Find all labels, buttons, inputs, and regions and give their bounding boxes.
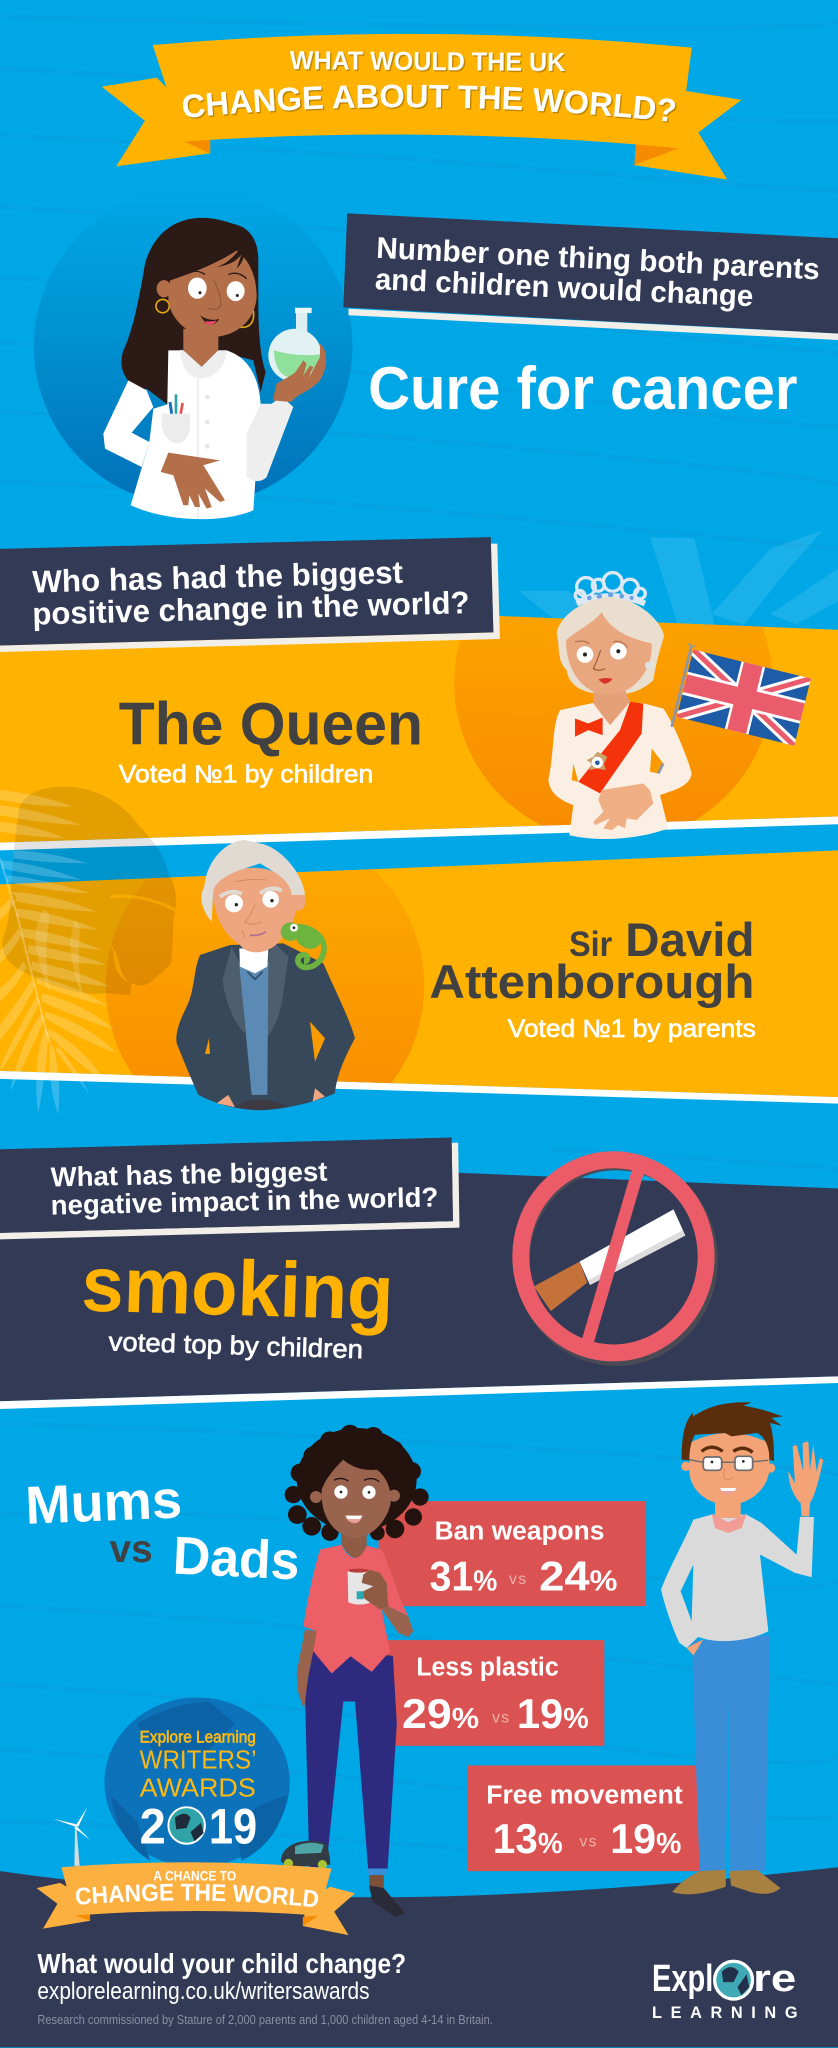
shirt [239,948,268,973]
pocket and pencils [162,394,190,443]
david attenborough figure [176,840,355,1110]
award year: 2 [140,1799,166,1855]
awards ribbon [36,1862,355,1936]
main ribbon [153,34,692,148]
face [168,250,257,337]
sir david text: David [625,913,754,966]
footer call to action [37,1948,493,2027]
mouth [250,932,266,935]
stat box: free movement: vs [580,1833,597,1850]
tiara jewels [587,592,634,600]
stat box: ban weapons: 31% [429,1552,497,1599]
smoking text: voted top by children [108,1326,364,1364]
circle behind queen [454,616,772,826]
flag pole [658,645,692,773]
nose and wrinkles [235,880,267,938]
sign shadow [522,1162,710,1358]
stat box: free movement: Free movement [486,1779,683,1809]
footer call to action: What would your child change? [37,1948,406,1979]
cure for cancer: Cure for cancer [368,355,798,422]
stat box: less plastic: 29% [402,1690,479,1737]
neck [183,329,218,367]
band: smoking [0,1156,838,1409]
band: sir david [0,850,838,1104]
face [322,1460,391,1538]
hands in pockets [217,1088,325,1107]
jeans [305,1651,397,1869]
eyebrows [220,888,282,897]
stat box: free movement: 13% [493,1815,563,1862]
neck [715,1498,741,1518]
sir david text [429,913,756,1043]
nose [724,1468,733,1480]
buttons [197,379,210,519]
car [281,1841,330,1869]
mums vs dads heading: vs [110,1528,153,1571]
hand holding flask [273,344,326,402]
stat box: less plastic: 19% [517,1690,589,1737]
explore learning logo: LEARNING [652,2004,798,2022]
raised hand [788,1441,823,1516]
mums vs dads heading [24,1470,301,1591]
tiara [575,573,645,604]
footer call to action: explorelearning.co.uk/writersawards [37,1978,370,2005]
title line one: WHAT WOULD THE UK [290,45,565,77]
award label: Explore Learning [140,1728,256,1747]
eyes [225,891,279,912]
bow [575,717,603,737]
arm gaps [572,748,663,782]
title banner [102,34,742,180]
coat arm [103,380,153,467]
trousers [235,1100,288,1110]
ear [291,891,306,911]
mums vs dads heading: Dads [172,1527,301,1591]
left tail [102,78,210,166]
circle behind scientist [34,187,352,506]
arm gap [681,1565,693,1621]
shoe [369,1885,405,1917]
dad legs [672,1635,781,1894]
awards globe [104,1698,290,1867]
jeans [692,1635,770,1872]
heading box: number one thing [343,213,838,340]
stat box: less plastic: vs [492,1709,509,1726]
decorative palm and silhouette left [0,787,176,1115]
stat box: ban weapons: Ban weapons [435,1516,604,1546]
right tail [634,91,741,179]
shoes [672,1870,781,1894]
hand in pocket [687,1640,703,1656]
hair [682,1402,783,1461]
heading box: number one thing: and children would change [374,263,754,313]
award year [140,1799,257,1855]
sash [578,702,643,793]
hair [557,597,664,694]
eyes [334,1478,379,1499]
heading text: Number one thing both parents [376,232,820,286]
dad upper body [661,1402,823,1656]
ears [310,1490,400,1503]
brooch [587,752,607,770]
stat box: free movement [467,1765,700,1871]
collar [712,1514,747,1533]
hair [121,218,266,404]
earring [645,662,652,669]
left fold [184,139,210,153]
right fold [634,144,679,165]
glasses [689,1456,768,1470]
the queen text: The Queen [119,691,423,758]
eyebrows [702,1447,753,1452]
neck [342,1523,367,1558]
hands [593,783,653,830]
awards ribbon: CHANGE THE WORLD [76,1884,318,1907]
ears [681,1462,775,1473]
decorative palm top right [518,531,838,627]
stat box: less plastic [379,1640,604,1746]
mouth [200,315,219,325]
explore learning logo: re [753,1958,796,2000]
heading box: negative impact [0,1138,459,1239]
flag [677,650,811,746]
stat box: ban weapons: vs [509,1571,526,1588]
neck and face [213,868,296,952]
face [566,612,652,695]
ground [0,1867,838,2047]
lower hand [161,453,225,509]
scientist [103,218,326,519]
coat body [131,350,261,519]
heading box: positive change [0,537,500,652]
mum legs [305,1651,405,1917]
cigarette [534,1209,685,1311]
sir david text: Voted №1 by parents [508,1016,756,1043]
award name: WRITERS’ [140,1745,256,1775]
mouth [719,1488,737,1495]
sign ring [521,1160,706,1353]
neck [593,690,630,725]
nose [593,650,605,670]
lapels [223,943,288,1038]
stat box: free movement: 19% [610,1815,681,1862]
shirt [303,1545,408,1674]
sir david text: Attenborough [429,955,754,1008]
nose [207,280,221,309]
chameleon [281,922,324,967]
mouth [598,678,613,684]
explore learning logo [652,1958,798,2022]
smoking text: smoking [80,1240,395,1337]
sweater [661,1515,814,1648]
heading text: What has the biggest [50,1156,328,1193]
heading box: negative impact: negative impact in the world? [50,1181,439,1221]
stat box: ban weapons: 24% [539,1552,617,1599]
footer call to action: Research commissioned by Stature of 2,000 parents and 1,000 children aged 4-14 in Britain. [37,2012,493,2027]
ribbon text: A CHANCE TO [153,1868,237,1883]
hair strands [217,249,245,269]
eyes [575,641,627,663]
award year: 19 [209,1799,257,1855]
band: the queen [0,616,838,850]
sleeve [247,396,293,481]
stat box: less plastic: Less plastic [416,1651,559,1681]
title line two: CHANGE ABOUT THE WORLD? [182,84,677,123]
head [689,1433,769,1505]
left arm [297,1630,317,1709]
no smoking sign [521,1160,710,1358]
jacket [176,943,355,1110]
dress [548,703,692,839]
cuff and ankle [368,1869,386,1891]
hand on mug [362,1570,388,1610]
ear and earrings [156,280,254,327]
the queen text [119,691,423,789]
sign bar [587,1170,638,1342]
queen figure [548,573,811,839]
explore learning logo: Expl [652,1958,713,2000]
flask [268,308,322,382]
hair [285,1425,429,1541]
heading text: Who has had the biggest [32,555,404,600]
circle behind david [106,869,424,1084]
hair [201,840,305,922]
heading box: positive change: positive change in the world? [32,585,470,632]
forearm [382,1606,413,1637]
sweater [239,962,268,1095]
mum upper body [285,1425,429,1709]
mouth [345,1516,363,1523]
sir david text: Sir [569,925,612,964]
stat box: ban weapons [379,1501,646,1606]
awards globe: AWARDS [140,1773,256,1803]
arm gaps [205,1022,325,1062]
mug [348,1569,373,1604]
wind turbine [54,1807,90,1866]
the queen text: Voted №1 by children [119,762,373,789]
eyes [188,271,247,301]
mums vs dads heading: Mums [24,1470,183,1536]
collar [180,350,227,379]
